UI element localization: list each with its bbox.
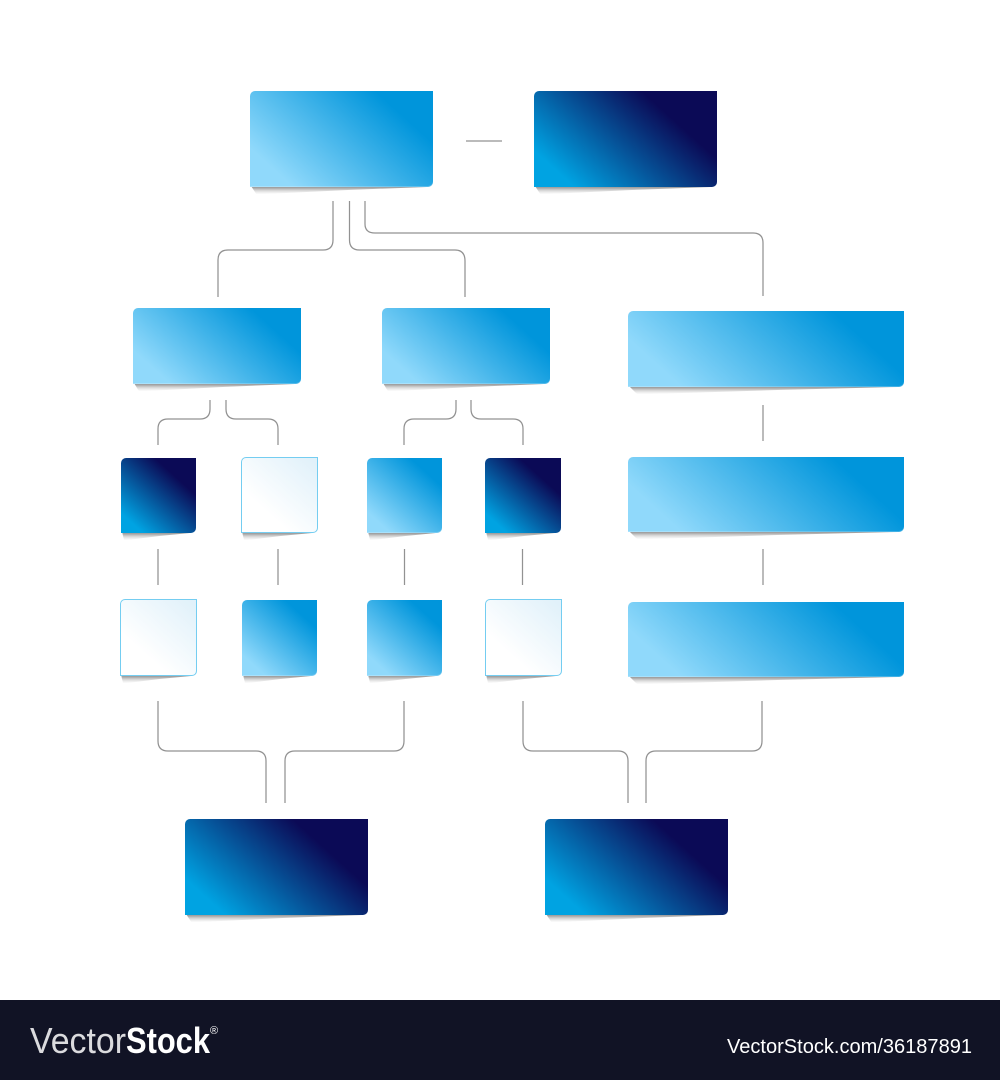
box: bottom left result (185, 819, 368, 922)
square: row 2 white (120, 599, 197, 682)
connector: third lower square to left result (285, 701, 404, 803)
connector: left branch to second square (226, 400, 278, 445)
footer logo: Vector (30, 1020, 126, 1061)
footer logo: ® (210, 1025, 218, 1037)
footer url: VectorStock.com/36187891 (727, 1036, 972, 1058)
square: row 1 light (367, 458, 442, 540)
box: right column second (628, 457, 904, 538)
footer band (0, 1000, 1000, 1080)
connector: middle branch to third square (404, 400, 456, 445)
vertical links between square rows (158, 549, 522, 585)
box: top dark blue (534, 91, 717, 194)
box: middle branch (382, 308, 550, 390)
box: right column first (628, 311, 904, 394)
connector: top box to left branch (218, 201, 333, 297)
square: row 1 white (241, 457, 318, 540)
link: top box to partner box (466, 140, 502, 142)
connector: top box to middle branch (350, 201, 465, 297)
box: left branch (133, 308, 301, 390)
footer logo: Stock (126, 1020, 211, 1061)
box: bottom right result (545, 819, 728, 922)
box: right column third (628, 602, 904, 684)
box: top light blue (250, 91, 433, 194)
vertical links in right column (762, 405, 764, 585)
square: row 2 white second (485, 599, 562, 682)
connector: middle branch to fourth square (471, 400, 523, 445)
square: row 2 light second (367, 600, 442, 682)
footer logo (30, 1020, 218, 1061)
connector: first lower square to left result (158, 701, 266, 803)
square: row 1 dark (121, 458, 196, 540)
square: row 1 dark second (485, 458, 561, 540)
connector: left branch to first square (158, 400, 210, 445)
connector: right column to right result (646, 701, 762, 803)
connector: top box to right column (365, 201, 763, 296)
square: row 2 light (242, 600, 317, 682)
connector: fourth lower square to right result (523, 701, 628, 803)
